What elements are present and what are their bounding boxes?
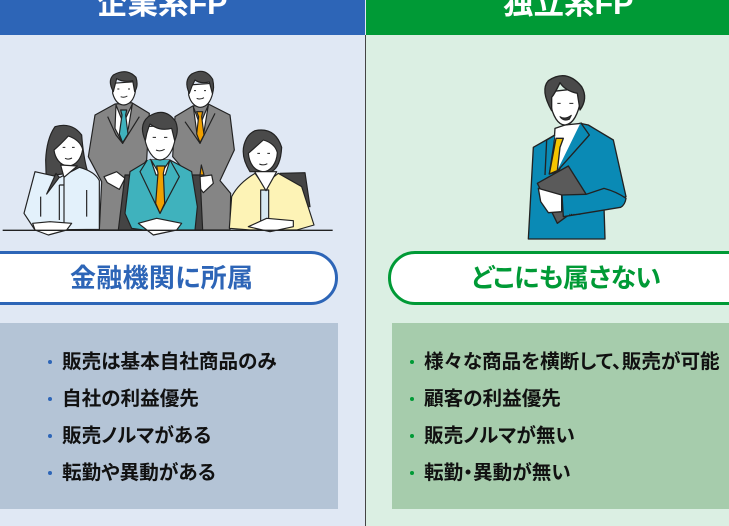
- pill: belongs nowhere: どこにも属さない: [471, 263, 660, 293]
- heading: independent FP: [366, 0, 729, 35]
- back-right man: [173, 71, 234, 230]
- pill: belongs to a financial institution: [0, 251, 338, 305]
- center divider: [365, 35, 366, 526]
- pill: belongs nowhere: [388, 251, 729, 305]
- trait list: [48, 351, 277, 484]
- illustration: man in blue suit holding a tablet: [528, 75, 627, 240]
- left panel background: [0, 35, 365, 526]
- panel: corporate FP traits: [0, 323, 338, 509]
- trait list: 転勤や異動がある: [62, 462, 216, 484]
- trait list: 販売ノルマがある: [62, 425, 211, 447]
- center man: [118, 112, 203, 235]
- trait list: 販売は基本自社商品のみ: [62, 351, 277, 373]
- trait list: 顧客の利益優先: [424, 388, 561, 410]
- trait list: 転勤・異動が無い: [424, 462, 571, 484]
- right panel background: [366, 35, 729, 526]
- table edge line: [3, 228, 333, 232]
- heading: corporate FP: [0, 0, 365, 35]
- right woman: [229, 130, 314, 232]
- illustration: group of five business people: [2, 70, 333, 236]
- left woman: [24, 125, 99, 235]
- trait list: 自社の利益優先: [62, 388, 199, 410]
- trait list: [410, 351, 720, 484]
- panel: independent FP traits: [392, 323, 729, 509]
- pill: belongs to a financial institution: 金融機関に所属: [70, 263, 253, 293]
- back-left man: [88, 72, 149, 230]
- trait list: 販売ノルマが無い: [424, 425, 575, 447]
- trait list: 様々な商品を横断して、販売が可能: [424, 351, 720, 373]
